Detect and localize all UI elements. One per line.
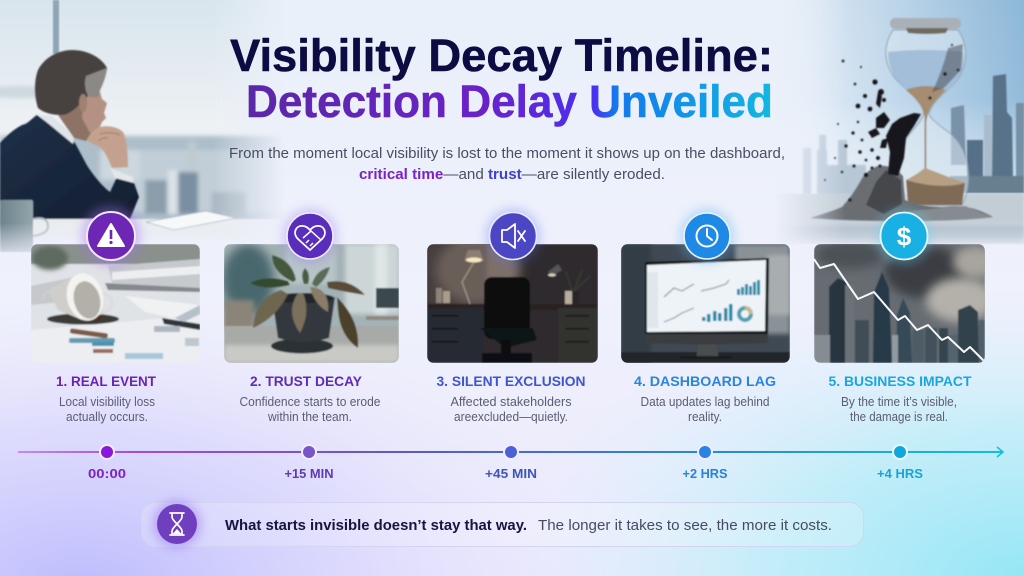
hand [87, 126, 128, 168]
milestone +15 min: +15 MIN [284, 467, 334, 481]
skyline [803, 74, 1024, 195]
icon: dollar sign: $ [897, 222, 912, 252]
step description: within the team. [267, 410, 352, 424]
step description: Local visibility loss [59, 395, 155, 409]
step description [841, 395, 957, 424]
suit [0, 115, 139, 219]
subtitle [229, 146, 785, 183]
panel: trust decay [222, 208, 399, 424]
step description [640, 395, 770, 424]
step heading: 2. TRUST DECAY [250, 374, 362, 389]
icon: heart handshake [282, 208, 338, 264]
neck [58, 104, 92, 142]
milestone +45 min [485, 444, 537, 481]
splash particles [824, 44, 959, 202]
milestone +15 min [284, 444, 334, 481]
step heading: 3. SILENT EXCLUSION [436, 374, 586, 389]
step heading: 1. REAL EVENT [56, 374, 157, 389]
step description: Confidence starts to erode [240, 395, 381, 409]
leaves [272, 255, 296, 282]
photo: falling chart over storm city [814, 241, 997, 363]
milestone +4 hrs: +4 HRS [877, 467, 923, 481]
callout message [225, 517, 832, 534]
milestone +4 hrs [877, 444, 923, 481]
panel: real event [31, 206, 200, 424]
step description [450, 395, 572, 424]
icon: warning triangle [81, 206, 141, 266]
photo: executive gazing at city [0, 0, 290, 252]
step heading: 5. BUSINESS IMPACT [828, 374, 972, 389]
shirt collar [38, 115, 74, 144]
debris mound [810, 166, 993, 221]
step description [240, 395, 381, 424]
face [82, 92, 107, 133]
icon: hourglass [153, 500, 201, 548]
photo: crumbling hourglass over skyline [770, 0, 1024, 244]
panel: dashboard lag [621, 208, 790, 424]
grey temple [85, 68, 107, 97]
step description: Affected stakeholders [450, 395, 572, 409]
step description: the damage is real. [850, 410, 948, 424]
ear [79, 94, 87, 112]
mug [0, 200, 33, 252]
milestone +2 hrs [682, 444, 728, 481]
step description: actually occurs. [66, 410, 148, 424]
hair [35, 50, 107, 115]
title [230, 30, 773, 127]
callout message: What starts invisible doesn’t stay that way. [225, 517, 527, 534]
step heading: 4. DASHBOARD LAG [634, 374, 776, 389]
milestone +2 hrs: +2 HRS [682, 467, 728, 481]
subtitle: critical time —and trust—are silently eroded. [359, 167, 665, 183]
step description: By the time it’s visible, [841, 395, 957, 409]
step description: reality. [688, 410, 722, 424]
photo: empty dark office [427, 236, 598, 363]
timeline axis arrow [18, 451, 1002, 453]
hourglass [886, 18, 969, 205]
photo: wilting plant [222, 244, 399, 363]
icon: dollar sign [876, 208, 932, 264]
photo: monitor with charts [621, 244, 790, 363]
panel: business impact [814, 208, 997, 424]
milestone 00:00 [88, 444, 126, 481]
icon: clock [679, 208, 735, 264]
callout message: The longer it takes to see, the more it costs. [538, 517, 832, 534]
step description: Data updates lag behind [640, 395, 770, 409]
table surface [32, 218, 275, 238]
step description [59, 395, 155, 424]
milestone +45 min: +45 MIN [485, 467, 537, 481]
step description: areexcluded—quietly. [454, 410, 568, 424]
title: Visibility Decay Timeline: [230, 30, 773, 81]
panel: silent exclusion [427, 208, 598, 424]
callout [142, 500, 864, 548]
milestone 00:00: 00:00 [88, 467, 126, 481]
photo: spilled coffee [31, 244, 200, 363]
icon: muted speaker [485, 208, 541, 264]
title: Detection Delay Unveiled [246, 76, 773, 127]
ground [770, 194, 1024, 244]
timeline [18, 444, 1003, 481]
subtitle: From the moment local visibility is lost to the moment it shows up on the dashboard, [229, 146, 785, 162]
